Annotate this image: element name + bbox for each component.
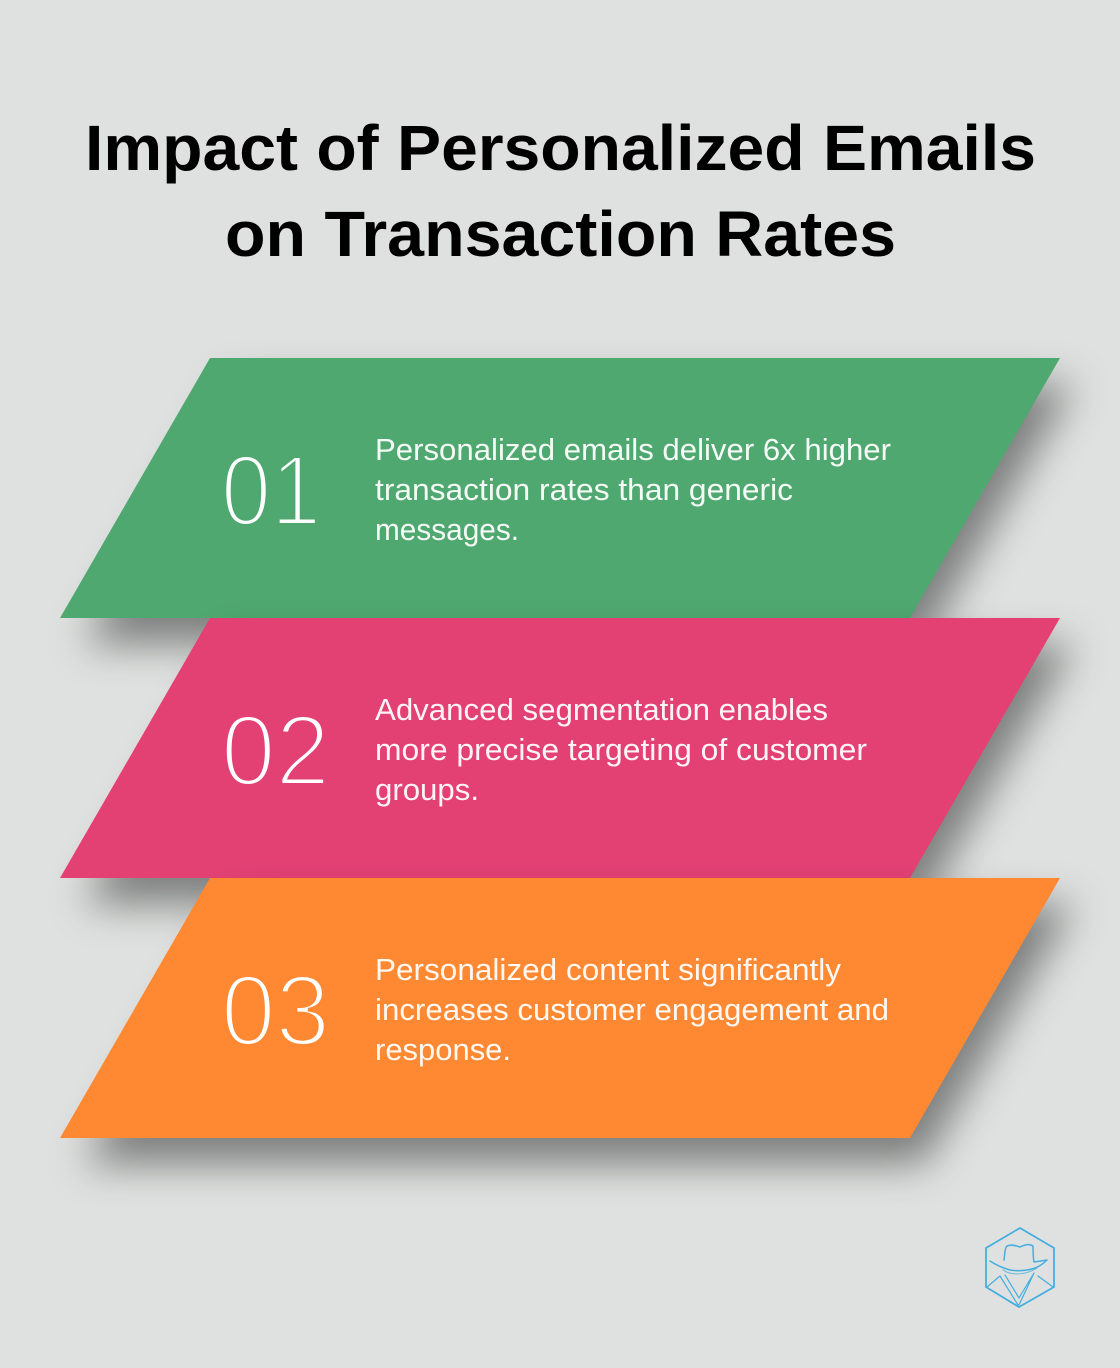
panel: 03 personalized content [60, 878, 1074, 1164]
description text: messages. [375, 512, 519, 547]
panel shadow [84, 644, 1074, 904]
description text: increases customer engagement and [375, 992, 889, 1027]
description text: Personalized content significantly [375, 952, 842, 987]
description text: more precise targeting of customer [375, 732, 867, 767]
title [85, 112, 1036, 270]
panel shadow [84, 384, 1074, 644]
description text: Advanced segmentation enables [375, 692, 828, 727]
green parallelogram [60, 358, 1060, 618]
number 03: 03 [221, 955, 330, 1067]
pink parallelogram [60, 618, 1060, 878]
description text [375, 432, 891, 547]
description text [375, 952, 889, 1067]
panel: 02 advanced segmentation [60, 618, 1074, 904]
title: on Transaction Rates [225, 198, 896, 270]
title: Impact of Personalized Emails [85, 112, 1036, 184]
orange parallelogram [60, 878, 1060, 1138]
panel shadow [84, 904, 1074, 1164]
icon: detective logo [986, 1228, 1054, 1307]
description text: groups. [375, 772, 479, 807]
description text: response. [375, 1032, 511, 1067]
panel: 01 personalized emails [60, 358, 1074, 644]
number 02: 02 [221, 695, 330, 807]
description text: Personalized emails deliver 6x higher [375, 432, 891, 467]
number 01: 01 [221, 435, 321, 547]
description text: transaction rates than generic [375, 472, 793, 507]
description text [375, 692, 867, 807]
